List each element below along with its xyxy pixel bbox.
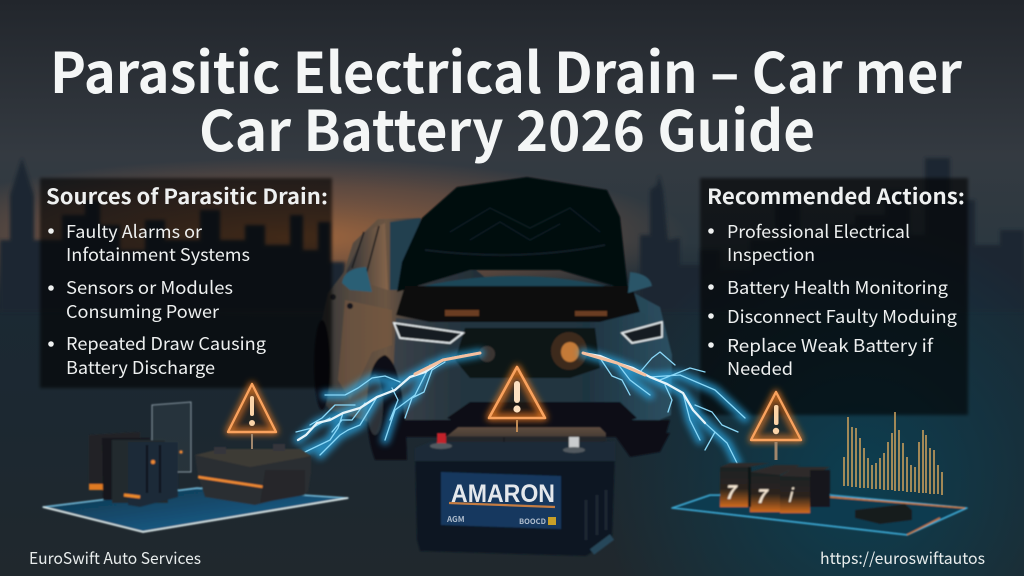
right scene: cells, chart and platform: 7 [724, 478, 738, 505]
engine bay [396, 286, 640, 322]
headlights [394, 323, 463, 343]
icon: warning triangle left [228, 384, 276, 449]
windshield [407, 276, 622, 290]
text block: recommended actions: Battery Health Monitoring [727, 275, 948, 300]
panel: actions background [700, 178, 968, 415]
small module [855, 504, 912, 524]
door handles [330, 294, 336, 300]
text block: sources of parasitic drain [46, 181, 328, 380]
icon: warning triangle right [751, 392, 801, 460]
text block: sources of parasitic drain: Repeated Draw Causing [66, 331, 266, 356]
city skyline silhouette [0, 158, 1024, 312]
bar chart [844, 412, 942, 495]
battery case [415, 441, 615, 556]
wheels [314, 320, 330, 410]
footer: company name: EuroSwift Auto Services [29, 545, 201, 569]
text block: recommended actions: Professional Electrical [727, 219, 910, 244]
car body [315, 218, 672, 428]
cell block [720, 467, 748, 507]
lightning: left arc [296, 353, 480, 455]
glass panel [152, 402, 191, 472]
left scene: modules and battery on platform [43, 402, 348, 532]
text block: sources of parasitic drain: Battery Discharge [66, 355, 215, 380]
terminals [437, 433, 446, 445]
text block: sources of parasitic drain: Consuming Power [66, 299, 219, 324]
text block: recommended actions [707, 181, 965, 381]
lightning: right arc [583, 352, 745, 463]
battery brand text: AMARON [451, 480, 555, 508]
right scene: cells, chart and platform: 7 [755, 482, 769, 509]
battery top cells [442, 427, 606, 449]
text block: sources of parasitic drain: Infotainment Systems [66, 242, 250, 267]
panel: sources background [40, 178, 332, 388]
footer: website: https://euroswiftautos [820, 545, 985, 569]
text block: recommended actions: Disconnect Faulty Moduing [727, 304, 957, 329]
right scene: cells, chart and platform [672, 463, 967, 535]
side windows [345, 223, 388, 290]
battery brand text [446, 480, 556, 527]
circuit platform [672, 495, 967, 535]
text block: sources of parasitic drain: Sensors or Modules [66, 275, 233, 300]
text block: sources of parasitic drain: Sources of Parasitic Drain: [46, 181, 328, 211]
battery brand text: AGM [446, 514, 465, 525]
title: Parasitic Electrical Drain – Car mer [50, 29, 963, 110]
text block: recommended actions: Replace Weak Battery if [727, 333, 934, 358]
text block: recommended actions: Inspection [727, 242, 815, 267]
battery [415, 427, 615, 556]
open hood [397, 177, 628, 292]
section panels [40, 178, 332, 388]
icon: warning triangle center [489, 367, 545, 432]
battery brand text: BOOCD [519, 516, 546, 527]
battery label [441, 472, 561, 529]
title [50, 29, 963, 168]
mirrors [342, 267, 372, 292]
small battery [195, 449, 311, 505]
front fascia [392, 312, 672, 428]
title: Car Battery 2026 Guide [199, 87, 815, 168]
text block: sources of parasitic drain: Faulty Alarms or [66, 219, 202, 244]
lower grille [447, 402, 637, 424]
rear and door highlights [338, 300, 392, 400]
text block: recommended actions: Recommended Actions: [707, 181, 965, 211]
circuit platform [43, 488, 348, 532]
text block: recommended actions: Needed [727, 356, 793, 381]
car with open hood [314, 177, 672, 460]
control modules [89, 432, 140, 490]
right scene: cells, chart and platform: i [787, 481, 795, 508]
